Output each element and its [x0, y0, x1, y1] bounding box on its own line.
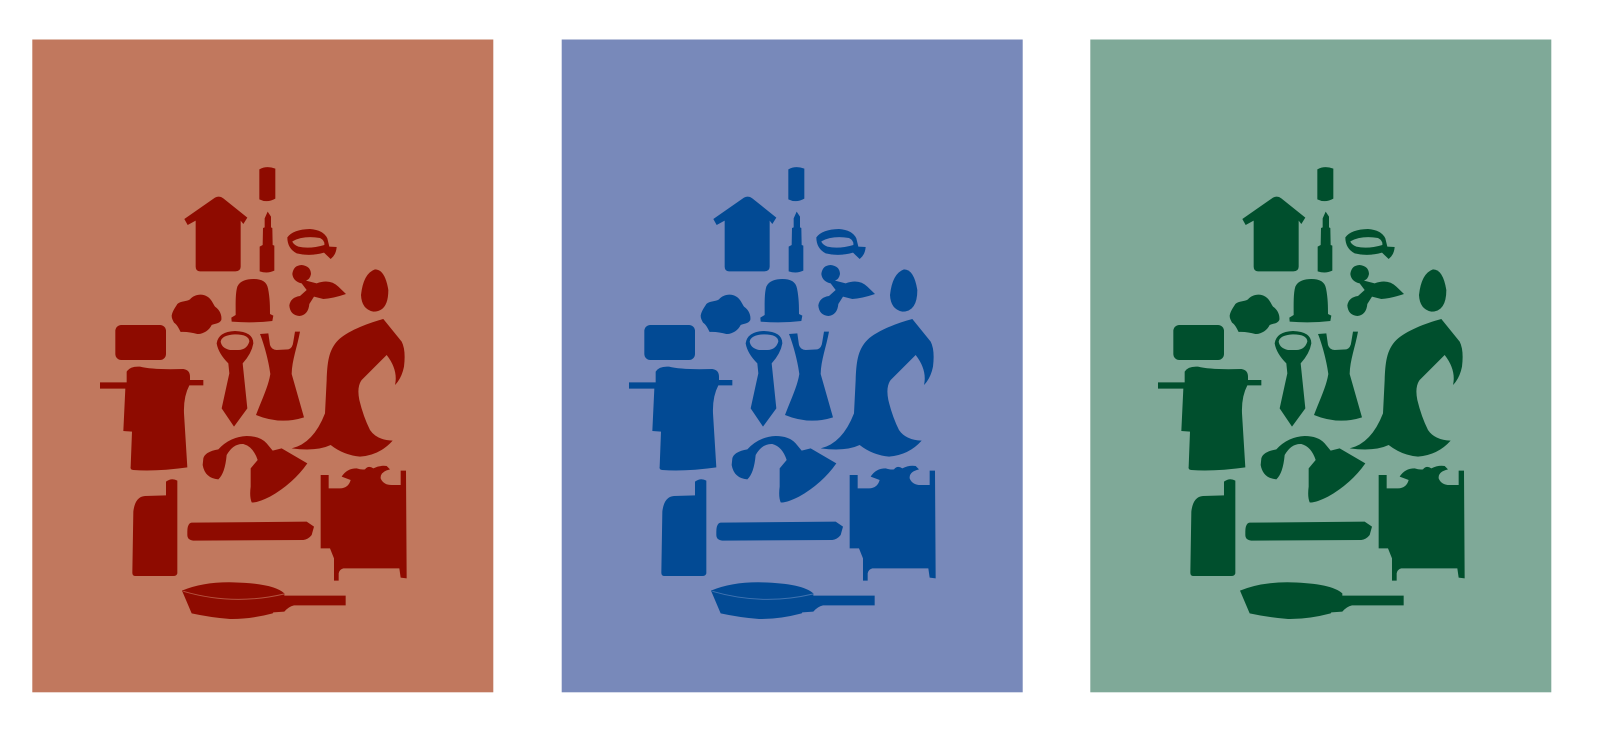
icon: mobile phone: [132, 479, 177, 576]
icon: woman: [292, 319, 405, 457]
icon: lipstick: [1318, 212, 1332, 273]
icon: house: [1242, 197, 1305, 271]
icon: bed: [1379, 466, 1465, 581]
icon: necktie: [746, 331, 782, 427]
icon: hat: [1289, 279, 1331, 322]
icon: bed: [321, 466, 407, 581]
icon: woman: [1350, 319, 1463, 457]
icon: bed: [850, 466, 936, 581]
silhouettes: blue: [629, 167, 936, 619]
icon: hat: [760, 279, 802, 322]
icon: lipstick: [789, 212, 803, 273]
icon: egg head: [1419, 269, 1446, 312]
icon: frying pan: [182, 582, 346, 619]
icon: rolling shirt: [100, 367, 203, 470]
icon: ring: [1345, 229, 1395, 259]
icon: shower head: [732, 436, 836, 502]
icon: hat: [231, 279, 273, 322]
icon: mobile phone: [661, 479, 706, 576]
icon: rolling shirt: [629, 367, 732, 470]
icon: mobile phone: [1190, 479, 1235, 576]
icon: dress: [256, 332, 304, 421]
silhouettes: green: [1158, 167, 1465, 619]
silhouettes: red: [100, 167, 407, 619]
icon: flower blob: [701, 295, 750, 334]
icon: dress: [1314, 332, 1362, 421]
panel: blue: [562, 40, 1023, 692]
icon: house: [184, 197, 247, 271]
icon: necktie: [1275, 331, 1311, 427]
icon: woman: [821, 319, 934, 457]
icon: balls and leaf: [818, 265, 875, 316]
icon: egg head: [890, 269, 917, 312]
icon: soap bar: [644, 325, 695, 360]
icon: long roll: [716, 522, 843, 541]
icon: balls and leaf: [289, 265, 346, 316]
icon: shower head: [203, 436, 307, 502]
icon: cylinder: [259, 167, 275, 201]
icon: house: [713, 197, 776, 271]
icon: rolling shirt: [1158, 367, 1261, 470]
icon: ring: [816, 229, 866, 259]
icon: flower blob: [1230, 295, 1279, 334]
icon: flower blob: [172, 295, 221, 334]
icon: shower head: [1261, 436, 1365, 502]
icon: lipstick: [260, 212, 274, 273]
icon: balls and leaf: [1347, 265, 1404, 316]
icon: frying pan: [1240, 582, 1404, 619]
panel: green: [1090, 40, 1551, 692]
icon: soap bar: [1173, 325, 1224, 360]
icon: long roll: [1245, 522, 1372, 541]
icon: ring: [287, 229, 337, 259]
icon: cylinder: [788, 167, 804, 201]
icon: necktie: [217, 331, 253, 427]
icon: cylinder: [1317, 167, 1333, 201]
icon: egg head: [361, 269, 388, 312]
panel: red: [32, 40, 493, 692]
icon: long roll: [187, 522, 314, 541]
icon: soap bar: [115, 325, 166, 360]
icon: dress: [785, 332, 833, 421]
icon: frying pan: [711, 582, 875, 619]
